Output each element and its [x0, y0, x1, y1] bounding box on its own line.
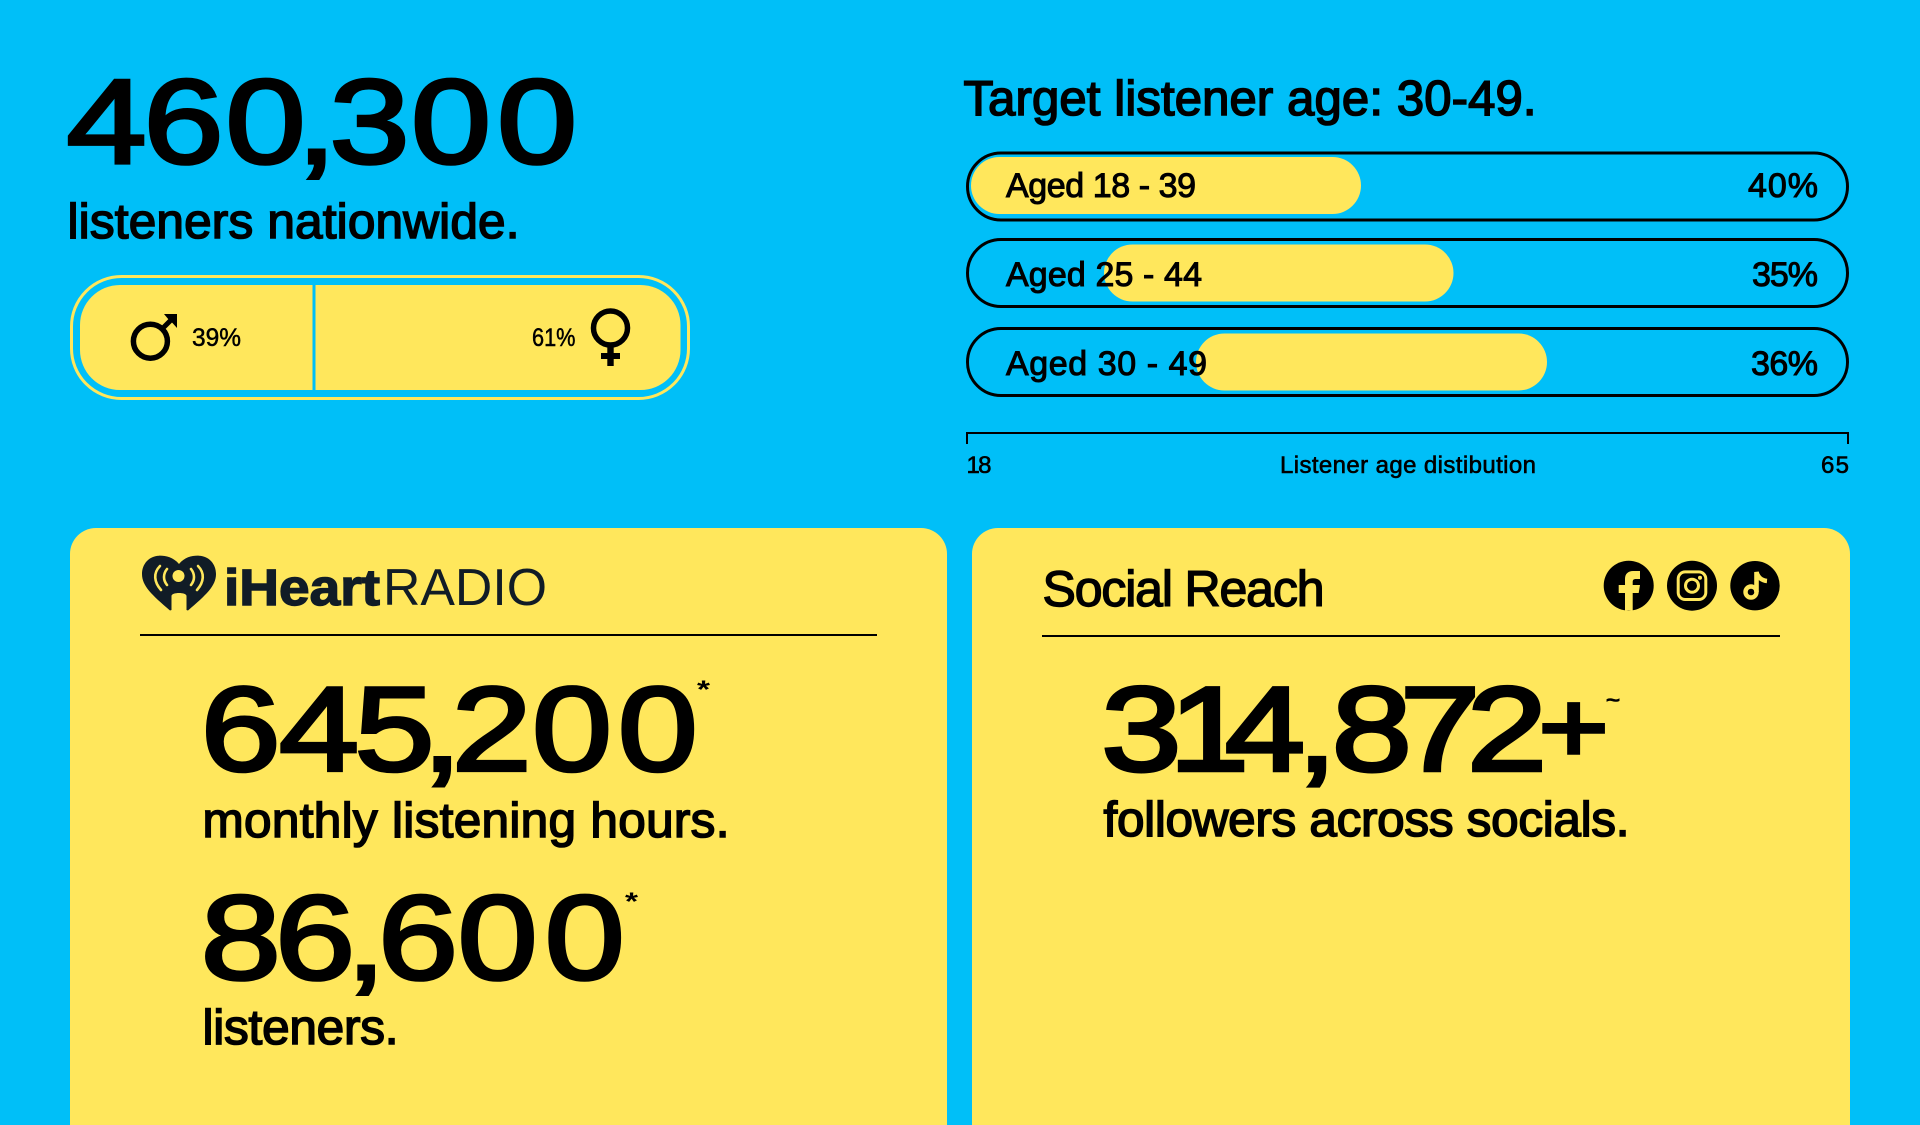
logo: iHeartRadio	[142, 556, 547, 617]
stat: monthly hours: 645,200	[201, 663, 698, 797]
age distribution axis	[966, 433, 1849, 479]
icon: instagram	[1667, 561, 1717, 611]
stat: listeners: *	[625, 888, 638, 916]
headline number: 460,300	[66, 55, 577, 189]
stat: followers: +	[1539, 672, 1609, 784]
age distribution axis: 65	[1821, 452, 1849, 479]
panel: target listener age	[964, 72, 1849, 479]
logo wordmark bold: iHeart	[224, 559, 380, 616]
stat: monthly hours: *	[697, 676, 710, 704]
icon: facebook	[1604, 561, 1654, 611]
age bar: 18-39	[968, 153, 1848, 220]
age heading: Target listener age: 30-49.	[964, 72, 1536, 126]
icon: tiktok	[1730, 561, 1780, 610]
gender split bar	[72, 276, 688, 398]
male percentage: 39%	[192, 324, 241, 352]
age distribution axis: Listener age distibution	[1280, 452, 1536, 479]
age bar: 30-49: 36%	[1751, 345, 1818, 383]
age bar: 25-44: Aged 25 - 44	[1006, 256, 1202, 294]
panel: iHeartRadio	[70, 528, 947, 1125]
age bar: 30-49	[968, 328, 1848, 396]
age bar: 25-44	[968, 240, 1848, 306]
age bar: 18-39: Aged 18 - 39	[1006, 167, 1196, 205]
stat: monthly hours	[201, 663, 730, 848]
age bar: 30-49: Aged 30 - 49	[1006, 345, 1207, 383]
icon: heart with radio waves	[142, 556, 216, 610]
female percentage: 61%	[532, 324, 576, 352]
age bar: 25-44: 35%	[1752, 256, 1818, 294]
stat: listeners: listeners.	[202, 1000, 398, 1055]
icon: male symbol	[133, 314, 177, 358]
icon: female symbol	[594, 311, 628, 366]
social heading: Social Reach	[1042, 561, 1324, 617]
stat: listeners: 86,600	[201, 871, 625, 1005]
headline caption: listeners nationwide.	[68, 194, 520, 249]
stat: followers: 314,872	[1101, 663, 1547, 797]
stat: followers: followers across socials.	[1104, 792, 1630, 847]
age distribution axis: 18	[966, 452, 992, 479]
stat: monthly hours: monthly listening hours.	[202, 793, 730, 848]
age bar: 18-39: 40%	[1748, 167, 1818, 205]
panel: national listeners	[66, 55, 689, 398]
stat: followers: ~	[1606, 690, 1620, 710]
logo wordmark light: RADIO	[383, 559, 547, 617]
stat: followers	[1101, 663, 1630, 847]
panel: social reach	[972, 528, 1850, 1125]
